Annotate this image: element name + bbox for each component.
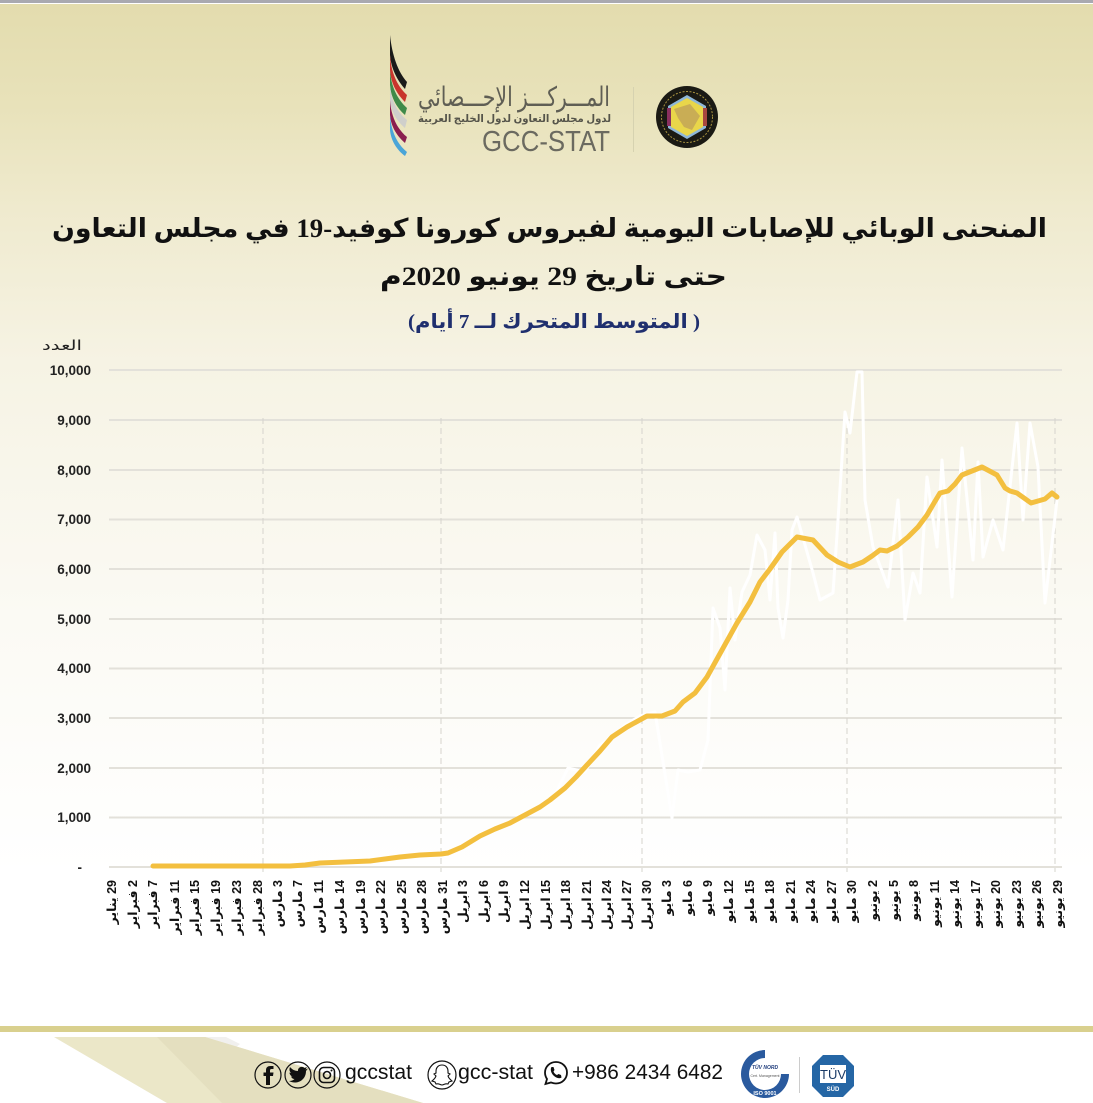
x axis labels: 26 يونيو — [1030, 880, 1044, 929]
x axis labels: 20 يونيو — [989, 880, 1003, 929]
icon: instagram — [314, 1062, 340, 1088]
x axis labels: 27 ابريل — [620, 880, 634, 930]
y axis labels: 1,000 — [57, 810, 91, 825]
x axis labels: 19 فبراير — [209, 880, 223, 936]
handle: gcc-stat — [458, 1061, 533, 1084]
y axis labels: 8,000 — [57, 463, 91, 478]
x axis labels: 9 مايو — [701, 880, 715, 916]
x axis labels: 29 يناير — [105, 880, 119, 925]
phone number: +986 2434 6482 — [572, 1061, 723, 1084]
x axis labels: 3 مارس — [271, 880, 285, 927]
x axis labels: 7 مارس — [291, 880, 305, 927]
social contacts — [255, 1061, 723, 1089]
y axis labels: 3,000 — [57, 711, 91, 726]
icon: TUV SUD badge: TÜV — [820, 1067, 846, 1082]
x axis labels: 28 مارس — [415, 880, 429, 934]
y axis labels — [50, 363, 91, 875]
x axis labels: 17 يونيو — [969, 880, 983, 929]
icon: snapchat — [428, 1061, 456, 1089]
logo wordmark: GCC-STAT — [482, 126, 610, 158]
x axis labels: 27 مايو — [825, 880, 839, 923]
title line 2: حتى تاريخ 29 يونيو 2020م — [380, 262, 727, 292]
x axis labels: 22 مارس — [374, 880, 388, 934]
y axis labels: 6,000 — [57, 562, 91, 577]
x axis labels: 12 مايو — [722, 880, 736, 923]
icon: twitter — [285, 1062, 311, 1088]
x axis labels: 18 ابريل — [559, 880, 573, 930]
x axis labels: 11 مارس — [312, 880, 326, 934]
x axis labels: 21 مايو — [784, 880, 798, 923]
icon: TUV SUD badge: SÜD — [827, 1086, 840, 1093]
x axis labels: 19 مارس — [354, 880, 368, 934]
x axis labels: 2 فبراير — [126, 880, 140, 929]
series: 7-day moving average — [153, 467, 1057, 866]
icon: facebook — [255, 1062, 281, 1088]
icon: TUV SUD badge — [812, 1055, 854, 1097]
x axis labels: 6 مايو — [681, 880, 695, 916]
series: daily cases — [555, 372, 1057, 818]
title line 1: المنحنى الوبائي للإصابات اليومية لفيروس كورونا كوفيد-19 في مجلس التعاون — [52, 214, 1047, 244]
handle: gccstat — [345, 1061, 412, 1084]
x axis labels: 5 يونيو — [887, 880, 901, 922]
icon: TUV Nord ISO 9001 badge — [741, 1050, 789, 1098]
x axis labels: 12 ابريل — [518, 880, 532, 930]
icon: GCC emblem — [656, 86, 718, 148]
x axis labels: 2 يونيو — [866, 880, 880, 922]
icon: ribbon — [390, 35, 407, 156]
footer band — [0, 1026, 1093, 1032]
x axis labels: 3 ابريل — [456, 880, 470, 923]
x axis labels: 11 فبراير — [168, 880, 182, 936]
x axis labels: 24 ابريل — [600, 880, 614, 930]
x axis labels: 15 مايو — [743, 880, 757, 923]
y axis labels: 10,000 — [50, 363, 91, 378]
icon: whatsapp — [545, 1062, 567, 1084]
x axis labels: 23 يونيو — [1010, 880, 1024, 929]
x axis labels: 30 مايو — [845, 880, 859, 923]
y axis labels: 9,000 — [57, 413, 91, 428]
y axis labels: 2,000 — [57, 761, 91, 776]
x axis labels: 14 يونيو — [948, 880, 962, 929]
y axis title: العدد — [42, 339, 82, 354]
x axis labels: 18 مايو — [763, 880, 777, 923]
y axis labels: 5,000 — [57, 612, 91, 627]
x axis labels: 3 مايو — [660, 880, 674, 916]
footer decoration — [54, 1037, 423, 1103]
line chart — [50, 363, 1065, 936]
x axis labels: 6 ابريل — [477, 880, 491, 923]
x axis labels: 9 ابريل — [497, 880, 511, 923]
x axis labels: 15 ابريل — [539, 880, 553, 930]
x axis labels: 21 ابريل — [580, 880, 594, 930]
y axis labels: - — [78, 860, 82, 875]
logo arabic name: المـــركـــز الإحـــصائي — [418, 82, 610, 113]
x axis labels: 25 مارس — [395, 880, 409, 934]
x axis labels: 30 ابريل — [640, 880, 654, 930]
x axis labels: 8 يونيو — [907, 880, 921, 922]
x axis labels: 14 مارس — [333, 880, 347, 934]
x axis labels: 24 مايو — [804, 880, 818, 923]
y axis labels: 7,000 — [57, 512, 91, 527]
x axis labels: 11 يونيو — [928, 880, 942, 928]
icon: TUV Nord ISO 9001 badge: TÜV NORD — [752, 1064, 778, 1071]
x axis labels: 15 فبراير — [188, 880, 202, 936]
x axis labels — [105, 880, 1065, 936]
y axis labels: 4,000 — [57, 661, 91, 676]
icon: TUV Nord ISO 9001 badge: Cert. Management — [750, 1074, 780, 1078]
x axis labels: 31 مارس — [436, 880, 450, 934]
icon: TUV Nord ISO 9001 badge: ISO 9001 — [753, 1091, 777, 1097]
logo: GCC-STAT — [390, 35, 718, 158]
x axis labels: 23 فبراير — [230, 880, 244, 936]
x axis labels: 28 فبراير — [251, 880, 265, 936]
logo arabic subtitle: لدول مجلس التعاون لدول الخليج العربية — [418, 114, 611, 125]
x axis labels: 7 فبراير — [146, 880, 160, 929]
subtitle: ( المتوسط المتحرك لــ 7 أيام) — [408, 307, 700, 333]
x axis labels: 29 يونيو — [1051, 880, 1065, 929]
